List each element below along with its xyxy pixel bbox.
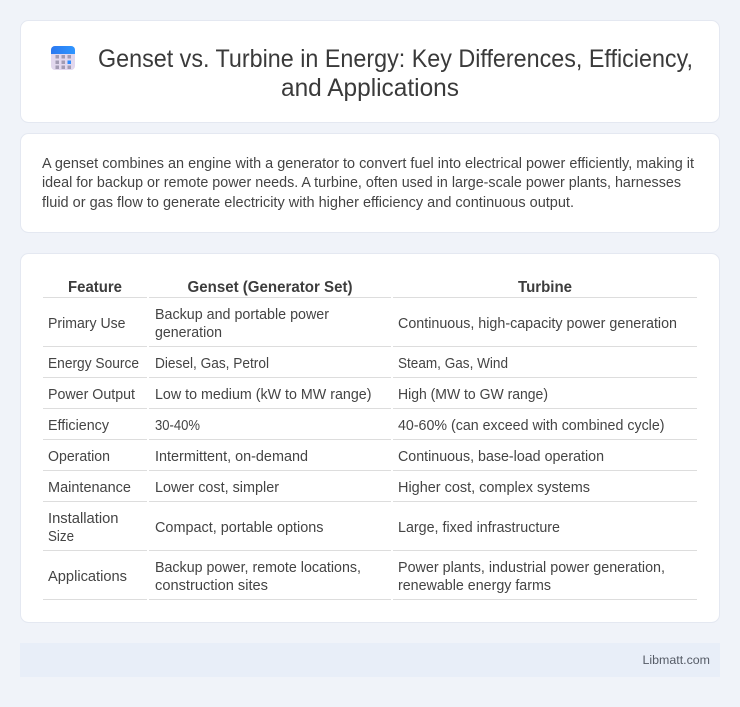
row: installation size: Large, fixed infrastructure (398, 520, 560, 536)
row: efficiency: 40-60% (can exceed with combined cycle) (398, 418, 664, 434)
table header row (43, 279, 697, 298)
row: installation size (43, 511, 697, 550)
row: maintenance: Higher cost, complex systems (398, 480, 590, 496)
row: maintenance: Maintenance (48, 480, 131, 496)
row: efficiency: 30-40% (155, 418, 200, 434)
row: maintenance: Lower cost, simpler (155, 480, 279, 496)
row: maintenance (43, 480, 697, 502)
row: applications: Power plants, industrial power generation, (398, 560, 665, 576)
table header row: Feature (68, 279, 122, 296)
footer text: Libmatt.com (642, 653, 710, 667)
table header row: Genset (Generator Set) (188, 279, 352, 296)
row: applications: Backup power, remote locations, (155, 560, 361, 576)
row: applications (43, 560, 697, 600)
row: primary use: Continuous, high-capacity power generation (398, 316, 677, 332)
title: Genset vs. Turbine in Energy: Key Differences, Efficiency, (98, 46, 693, 73)
row: primary use: Backup and portable power (155, 307, 329, 323)
row: power output: High (MW to GW range) (398, 387, 548, 403)
row: energy source: Steam, Gas, Wind (398, 356, 508, 372)
row: installation size: Size (48, 529, 74, 545)
row: power output: Power Output (48, 387, 135, 403)
row: primary use (43, 307, 697, 346)
row: installation size: Compact, portable options (155, 520, 324, 536)
intro panel (20, 134, 720, 232)
title (98, 46, 693, 102)
footer bar (20, 643, 720, 677)
row: primary use: generation (155, 325, 222, 341)
intro text: A genset combines an engine with a generator to convert fuel into electrical power efficiently, making it (42, 156, 694, 172)
row: efficiency: Efficiency (48, 418, 110, 434)
row: operation: Continuous, base-load operation (398, 449, 604, 465)
icon: calendar (51, 46, 75, 70)
row: energy source: Energy Source (48, 356, 139, 372)
row: applications: construction sites (155, 578, 268, 594)
row: primary use: Primary Use (48, 316, 126, 332)
table panel (20, 254, 720, 622)
intro text: ideal for backup or remote power needs. A turbine, often used in large-scale power plants, harnesses (42, 175, 681, 191)
row: power output (43, 387, 697, 408)
row: energy source (43, 356, 697, 378)
header panel (20, 20, 720, 122)
row: operation: Intermittent, on-demand (155, 449, 308, 465)
row: energy source: Diesel, Gas, Petrol (155, 356, 269, 372)
intro text: fluid or gas flow to generate electricity with higher efficiency and continuous output. (42, 195, 574, 211)
row: applications: Applications (48, 569, 127, 585)
row: installation size: Installation (48, 511, 119, 527)
table header row: Turbine (518, 279, 572, 296)
intro text (42, 156, 694, 211)
row: operation (43, 449, 697, 470)
row: applications: renewable energy farms (398, 578, 551, 594)
row: power output: Low to medium (kW to MW range) (155, 387, 372, 403)
row: efficiency (43, 418, 697, 440)
title: and Applications (281, 75, 459, 102)
row: operation: Operation (48, 449, 110, 465)
